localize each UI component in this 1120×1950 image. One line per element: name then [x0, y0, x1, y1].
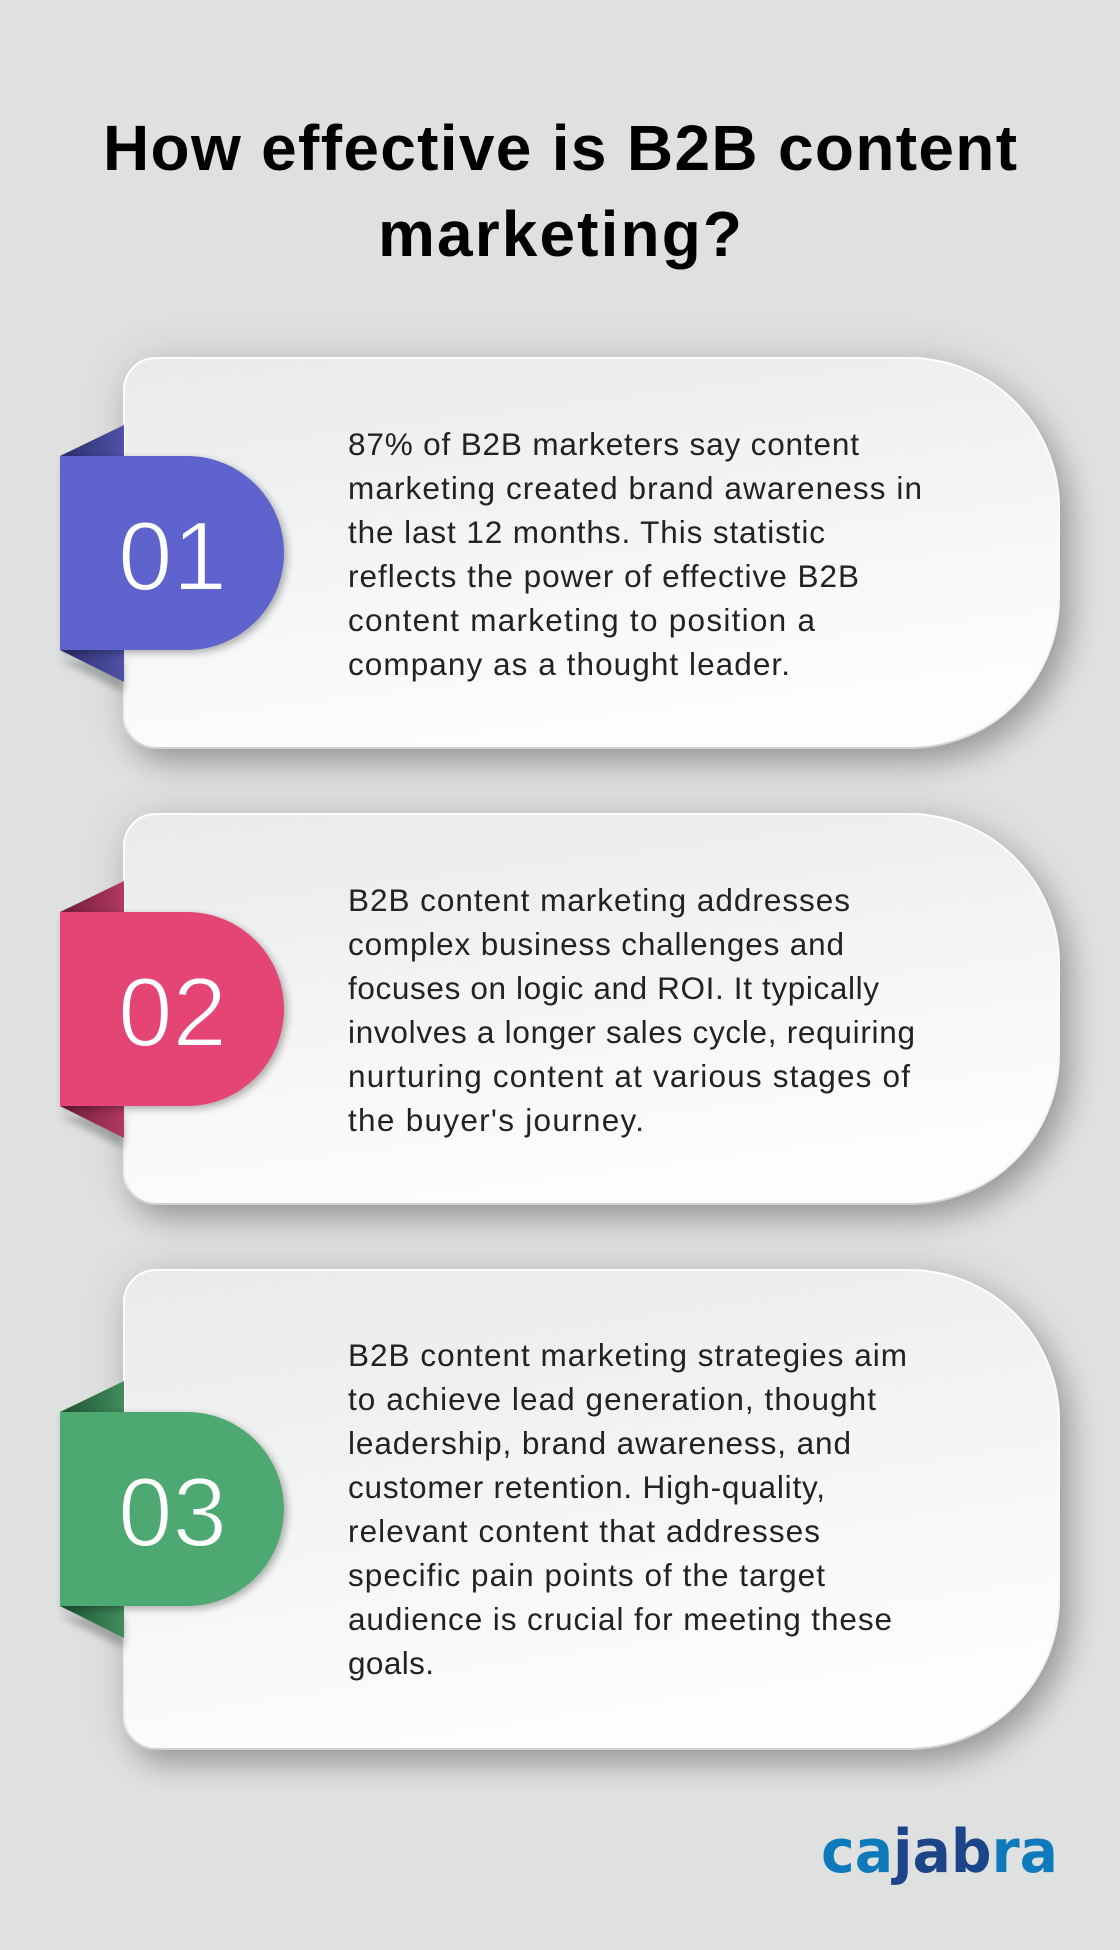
text block: card 2	[348, 882, 915, 1138]
text block: card 3: leadership, brand awareness, and	[348, 1425, 851, 1461]
title: How effective is B2B content	[103, 112, 1017, 184]
text block: card 2: B2B content marketing addresses	[348, 882, 850, 918]
logo: cajabra: cajabra	[821, 1817, 1058, 1887]
badge: 01: 01	[118, 501, 227, 611]
text block: card 3: audience is crucial for meeting these	[348, 1601, 892, 1637]
badge: 03: 03	[118, 1457, 227, 1567]
badge: 02	[60, 881, 287, 1148]
title: marketing?	[378, 198, 742, 270]
text block: card 1: content marketing to position a	[348, 602, 815, 638]
text block: card 1: reflects the power of effective B2B	[348, 558, 859, 594]
text block: card 1: the last 12 months. This statistic	[348, 514, 825, 550]
text block: card 2: complex business challenges and	[348, 926, 844, 962]
text block: card 3: specific pain points of the target	[348, 1557, 825, 1593]
text block: card 2: nurturing content at various stages of	[348, 1058, 910, 1094]
badge: 03	[60, 1381, 287, 1648]
text block: card 2: involves a longer sales cycle, requiring	[348, 1014, 915, 1050]
text block: card 3: relevant content that addresses	[348, 1513, 820, 1549]
text block: card 1: marketing created brand awareness in	[348, 470, 922, 506]
text block: card 1	[348, 426, 922, 682]
text block: card 3: to achieve lead generation, thought	[348, 1381, 876, 1417]
text block: card 2: the buyer's journey.	[348, 1102, 644, 1138]
panel: card 1	[60, 358, 1069, 762]
text block: card 3	[348, 1337, 907, 1681]
text block: card 3: customer retention. High-quality,	[348, 1469, 825, 1505]
text block: card 3: goals.	[348, 1645, 434, 1681]
text block: card 3: B2B content marketing strategies aim	[348, 1337, 907, 1373]
panel: card 3	[60, 1270, 1069, 1763]
text block: card 1: 87% of B2B marketers say content	[348, 426, 859, 462]
text block: card 2: focuses on logic and ROI. It typically	[348, 970, 879, 1006]
panel: card 2	[60, 814, 1069, 1218]
badge: 01	[60, 425, 287, 692]
badge: 02: 02	[118, 957, 227, 1067]
text block: card 1: company as a thought leader.	[348, 646, 790, 682]
title	[103, 112, 1017, 270]
